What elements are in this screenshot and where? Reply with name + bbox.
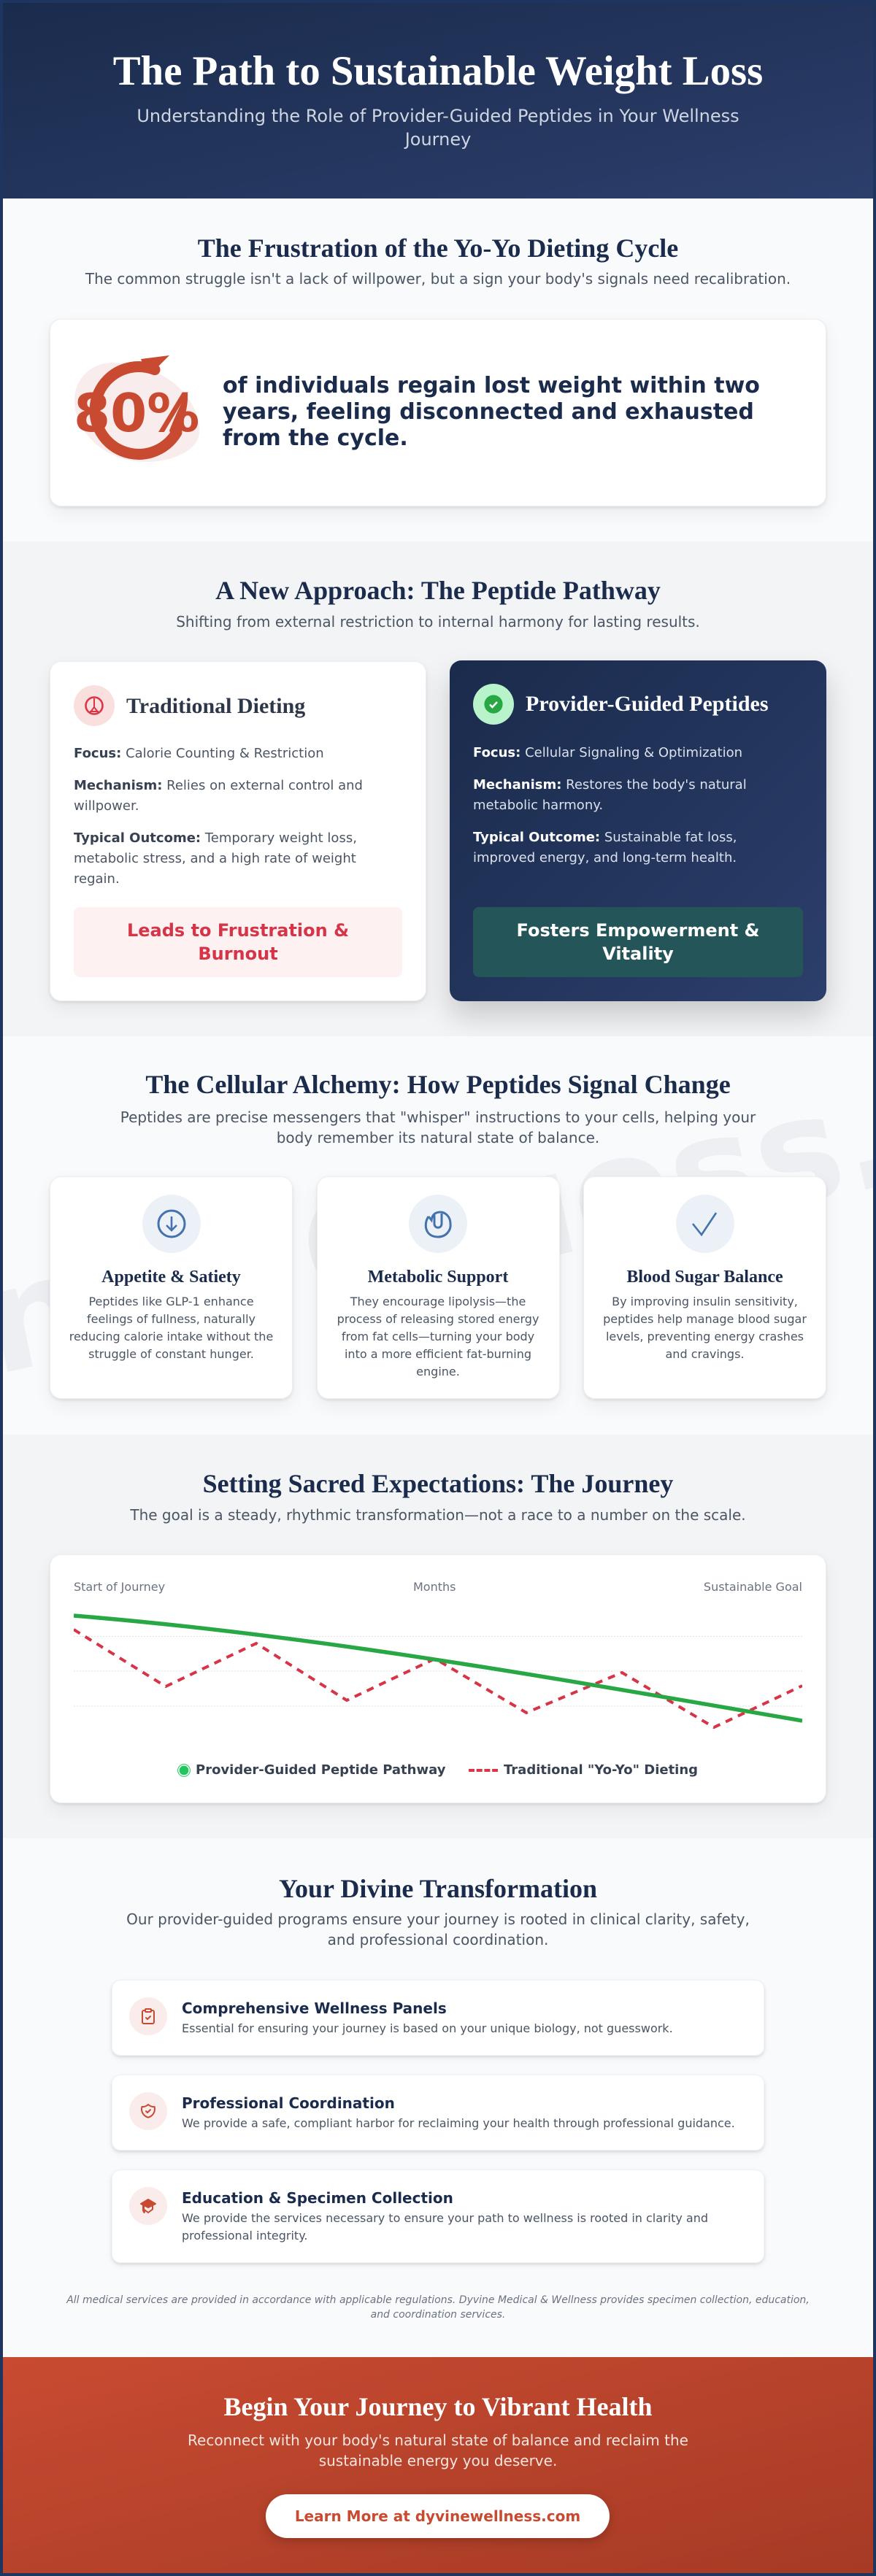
panel: provider-guided peptides	[450, 660, 826, 1001]
text: Reconnect with your body's natural state of balance and reclaim the	[188, 2432, 688, 2449]
line chart	[74, 1613, 802, 1729]
axis label: months: Months	[413, 1580, 456, 1594]
section intro	[120, 1108, 756, 1146]
button	[266, 2494, 610, 2538]
watermark lettering: ı	[507, 1117, 592, 1294]
disclaimer: and coordination services.	[371, 2309, 505, 2321]
heading: The Cellular Alchemy: How Peptides Signal Change	[145, 1070, 731, 1099]
statistic text	[223, 373, 760, 451]
legend label: yo-yo: Traditional "Yo-Yo" Dieting	[504, 1762, 698, 1778]
card title: Blood Sugar Balance	[626, 1268, 783, 1287]
card text	[69, 1295, 273, 1360]
panel: 80 percent statistic	[50, 319, 826, 506]
heading: Begin Your Journey to Vibrant Health	[223, 2392, 653, 2421]
card text: By improving insulin sensitivity,	[612, 1295, 798, 1308]
section intro: body remember its natural state of balance.	[277, 1128, 599, 1146]
section intro	[126, 1910, 750, 1948]
focus: Focus: Calorie Counting & Restriction	[74, 746, 324, 761]
panel: journey chart	[50, 1554, 826, 1803]
card title: Traditional Dieting	[126, 693, 305, 718]
section intro: The common struggle isn't a lack of willpower, but a sign your body's signals need recalibration.	[85, 270, 791, 288]
legend label: peptide pathway: Provider-Guided Peptide Pathway	[196, 1762, 445, 1778]
item text	[182, 2211, 708, 2243]
item title: Comprehensive Wellness Panels	[182, 2000, 447, 2017]
mechanism	[74, 778, 363, 814]
icon: shield check	[129, 2092, 167, 2130]
card text: and cravings.	[666, 1347, 745, 1360]
chart legend	[177, 1762, 698, 1778]
typical outcome: Typical Outcome: Temporary weight loss,	[74, 830, 357, 846]
heading: Your Divine Transformation	[279, 1874, 597, 1903]
panel: metabolic support	[317, 1176, 559, 1399]
outcome callout: Leads to Frustration &	[127, 920, 349, 941]
card text: peptides help manage blood sugar	[603, 1312, 807, 1325]
icon: check mark	[676, 1195, 734, 1253]
statistic text: from the cycle.	[223, 425, 408, 451]
focus: Focus: Cellular Signaling & Optimization	[473, 745, 742, 760]
legend marker: yo-yo	[469, 1769, 498, 1772]
typical outcome: metabolic stress, and a high rate of weight	[74, 851, 356, 866]
disclaimer	[66, 2294, 810, 2321]
card text: into a more efficient fat-burning	[345, 1347, 531, 1360]
typical outcome	[473, 830, 737, 865]
outcome callout	[74, 907, 402, 977]
section: setting expectations	[0, 1435, 876, 1838]
card text: Peptides like GLP-1 enhance	[88, 1295, 254, 1308]
section intro: Shifting from external restriction to internal harmony for lasting results.	[176, 613, 700, 630]
card title: Appetite & Satiety	[101, 1268, 241, 1287]
item title: Education & Specimen Collection	[182, 2189, 453, 2207]
section intro: The goal is a steady, rhythmic transformation—not a race to a number on the scale.	[130, 1506, 746, 1524]
axis label: goal: Sustainable Goal	[704, 1580, 802, 1594]
section intro: Peptides are precise messengers that "whisper" instructions to your cells, helping your	[120, 1108, 756, 1125]
panel: wellness panels	[112, 1980, 764, 2056]
outcome callout	[473, 907, 803, 977]
item text: We provide the services necessary to ensure your path to wellness is rooted in clarity and	[182, 2211, 708, 2225]
panel: appetite and satiety	[50, 1176, 293, 1399]
card text	[337, 1295, 539, 1378]
item text: professional integrity.	[182, 2229, 307, 2243]
icon: 80 percent with circular arrow: 80%	[74, 382, 199, 444]
axis label: start: Start of Journey	[74, 1580, 165, 1594]
icon: 80 percent with circular arrow	[74, 355, 199, 462]
item text: Essential for ensuring your journey is based on your unique biology, not guesswork.	[182, 2021, 673, 2035]
subtitle: Understanding the Role of Provider-Guided Peptides in Your Wellness	[137, 106, 739, 126]
outcome callout: Burnout	[198, 944, 278, 964]
typical outcome: Typical Outcome: Sustainable fat loss,	[473, 830, 737, 845]
statistic text: of individuals regain lost weight within two	[223, 373, 760, 398]
disclaimer: All medical services are provided in accordance with applicable regulations. Dyvine Medical & Wellness provides specimen collection, education,	[66, 2294, 810, 2306]
peptide pathway line	[74, 1616, 802, 1721]
heading: A New Approach: The Peptide Pathway	[215, 576, 661, 605]
panel: education and specimen collection	[112, 2170, 764, 2263]
text	[188, 2432, 688, 2469]
button: Learn More at dyvinewellness.com	[295, 2507, 580, 2525]
heading: Setting Sacred Expectations: The Journey	[203, 1469, 673, 1498]
watermark lettering: C	[286, 1152, 426, 1341]
section: yo-yo dieting frustration	[0, 198, 876, 541]
title: The Path to Sustainable Weight Loss	[113, 48, 763, 94]
legend marker: peptide pathway	[177, 1764, 191, 1777]
statistic text: years, feeling disconnected and exhausted	[223, 399, 754, 425]
section intro: Our provider-guided programs ensure your journey is rooted in clinical clarity, safety,	[126, 1910, 750, 1928]
icon: restriction symbol	[74, 685, 115, 726]
card text: from fat cells—turning your body	[342, 1330, 534, 1343]
mechanism: willpower.	[74, 798, 139, 814]
section intro: and professional coordination.	[328, 1931, 548, 1948]
header banner	[0, 0, 876, 198]
subtitle: Journey	[405, 129, 471, 150]
section: divine transformation	[0, 1838, 876, 2357]
panel: professional coordination	[112, 2075, 764, 2151]
card title: Provider-Guided Peptides	[526, 692, 768, 716]
card text: process of releasing stored energy	[337, 1312, 539, 1325]
card text: They encourage lipolysis—the	[350, 1295, 526, 1308]
section: new approach comparison	[0, 541, 876, 1036]
card text: levels, preventing energy crashes	[606, 1330, 804, 1343]
call to action	[0, 2357, 876, 2576]
text: sustainable energy you deserve.	[319, 2452, 557, 2469]
outcome callout: Vitality	[602, 944, 674, 964]
icon: clipboard check	[129, 1997, 167, 2035]
mechanism: metabolic harmony.	[473, 798, 603, 813]
watermark lettering	[0, 1049, 876, 1408]
section: cellular alchemy	[0, 1036, 876, 1435]
icon: arrow down circle	[142, 1195, 200, 1253]
card text: reducing calorie intake without the	[69, 1330, 273, 1343]
card text: struggle of constant hunger.	[88, 1347, 254, 1360]
panel: blood sugar balance	[583, 1176, 826, 1399]
icon: graduation cap	[129, 2187, 167, 2225]
icon: metabolic flame loop	[409, 1195, 467, 1253]
card text: engine.	[416, 1365, 460, 1378]
item text: We provide a safe, compliant harbor for reclaiming your health through professional guidance.	[182, 2116, 735, 2130]
card text: feelings of fullness, naturally	[87, 1312, 256, 1325]
mechanism: Mechanism: Relies on external control and	[74, 778, 363, 793]
typical outcome	[74, 830, 357, 887]
panel: traditional dieting	[50, 661, 426, 1001]
typical outcome: improved energy, and long-term health.	[473, 850, 737, 865]
typical outcome: regain.	[74, 871, 120, 887]
heading: The Frustration of the Yo-Yo Dieting Cycle	[198, 234, 678, 263]
item title: Professional Coordination	[182, 2094, 395, 2112]
card title: Metabolic Support	[368, 1268, 508, 1287]
icon: green check	[473, 684, 514, 725]
mechanism: Mechanism: Restores the body's natural	[473, 777, 747, 793]
outcome callout: Fosters Empowerment &	[517, 920, 759, 941]
yo-yo dieting line	[74, 1630, 802, 1727]
card text	[603, 1295, 807, 1360]
subtitle	[137, 106, 739, 150]
mechanism	[473, 777, 747, 813]
